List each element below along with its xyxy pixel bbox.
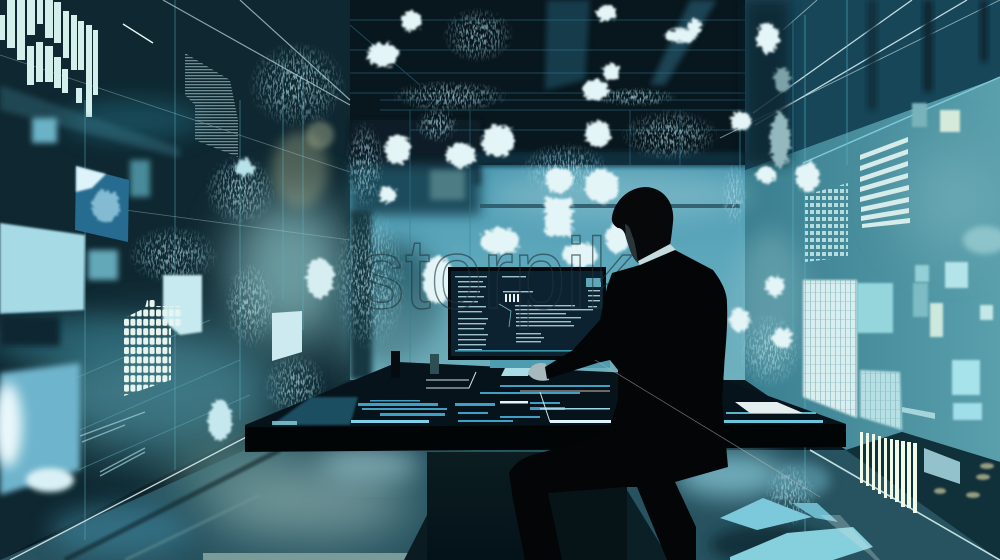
ear and face shade — [625, 224, 638, 263]
blurred squares — [32, 118, 150, 280]
cream indicator dots — [934, 463, 994, 498]
watermark: storpik — [358, 218, 634, 330]
textured block — [860, 370, 902, 430]
lower left lines of text — [80, 412, 145, 476]
angled strip — [902, 407, 935, 419]
dot matrix — [124, 300, 182, 396]
stool — [548, 487, 627, 560]
thin foreground line — [595, 360, 820, 497]
right wall panels and charts — [803, 103, 1000, 513]
textured white column — [803, 280, 857, 418]
monitor — [448, 267, 610, 368]
person silhouette — [509, 187, 728, 560]
dark back-wall upper speckle zone — [350, 120, 745, 380]
barcode — [860, 432, 917, 513]
desk — [245, 351, 846, 560]
floor tiles — [203, 498, 880, 560]
desk surface data glyphs — [272, 372, 823, 425]
shirt collar — [638, 244, 676, 266]
dotted data grid — [805, 183, 848, 262]
bright vertical bar chart — [0, 0, 98, 117]
hatched data block — [185, 53, 238, 157]
desk top surface — [245, 362, 846, 428]
left wall panels and charts — [0, 0, 302, 495]
pale screen — [163, 275, 202, 335]
desk pedestal — [427, 452, 627, 560]
pale teal screen — [857, 283, 893, 333]
desk object: speaker — [391, 351, 400, 378]
monitor bar glyph — [505, 294, 519, 302]
suit body and legs — [509, 250, 728, 560]
bright left screen — [0, 223, 85, 314]
monitor code text lines — [455, 276, 601, 352]
keyboard — [501, 368, 532, 376]
striped white block — [860, 137, 910, 228]
desk edge — [245, 424, 846, 452]
small bright screen — [272, 311, 302, 361]
hand — [528, 363, 549, 381]
white accent stroke — [123, 24, 153, 43]
monitor small graph — [499, 304, 511, 327]
right wall dark upper strips — [745, 0, 988, 165]
ceiling light beams — [545, 0, 717, 90]
desk object: cup — [430, 354, 439, 374]
monitor stand — [490, 360, 610, 368]
scan-line stripe — [0, 85, 180, 158]
blue network screen — [75, 166, 129, 242]
lower-left bright screen — [0, 363, 80, 495]
dark band — [0, 316, 60, 346]
small data block — [924, 448, 960, 484]
monitor corner widget — [586, 278, 601, 287]
pale cream tiles — [912, 103, 1000, 420]
ceiling grid lines — [350, 20, 745, 380]
head — [612, 187, 673, 263]
speckled data dust — [127, 7, 816, 527]
data clouds — [208, 5, 820, 440]
